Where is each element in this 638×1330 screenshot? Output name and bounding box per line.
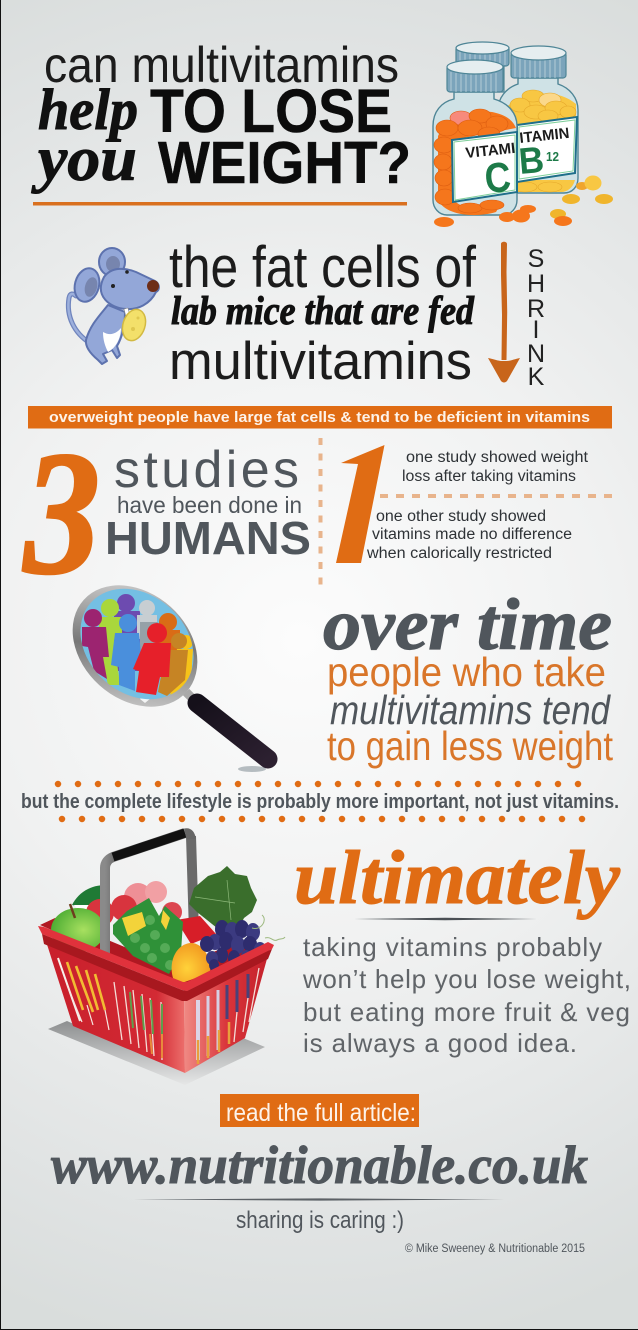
text: conclusion (302, 932, 631, 1058)
icon: vitamin bottles (433, 42, 613, 227)
handle front (105, 833, 185, 955)
text: study two: when calorically restricted (366, 545, 552, 562)
vertical word: SHRINK: R (527, 295, 545, 323)
script word: help: help (38, 77, 138, 142)
heading line: WEIGHT?: WEIGHT? (158, 130, 411, 196)
bottle C: C (483, 153, 513, 202)
vertical word: SHRINK: H (527, 270, 545, 298)
basket slots (58, 958, 259, 1064)
text: study two: one other study showed (376, 508, 546, 525)
panel: lab mice (68, 235, 545, 391)
panel: ultimately (294, 836, 631, 1058)
basket rim (38, 926, 274, 991)
vertical word: SHRINK: K (528, 363, 545, 391)
button: read the full article: read the full article: (226, 1099, 416, 1127)
loose pills (434, 176, 613, 227)
heading line: TO LOSE: TO LOSE (150, 77, 392, 145)
text: conclusion: but eating more fruit & veg (303, 997, 630, 1027)
arrow: shrink (488, 242, 520, 382)
bottle B12: B (517, 139, 546, 182)
text: study two (366, 508, 572, 562)
text: study one: one study showed weight (406, 449, 589, 466)
copyright: © Mike Sweeney & Nutritionable 2015 (405, 1243, 585, 1255)
text: studies: studies (114, 441, 299, 499)
text: conclusion: taking vitamins probably (303, 932, 602, 962)
bottle B12: ITAMIN (519, 125, 570, 147)
banner: overweight people (28, 406, 612, 428)
basket right face (184, 948, 270, 1073)
panel: three studies (22, 416, 311, 611)
script url: www.nutritionable.co.uk (51, 1135, 588, 1195)
text: conclusion: is always a good idea. (303, 1028, 577, 1058)
panel: study results (336, 445, 612, 563)
text: people who take: people who take (327, 649, 606, 695)
panel: over time (323, 584, 614, 769)
panel: title (31, 37, 411, 206)
text: HUMANS: HUMANS (105, 512, 311, 564)
lens rim (48, 560, 222, 732)
vertical word: SHRINK (527, 245, 545, 391)
horizontal dashed divider (380, 494, 612, 498)
text: the fat cells of: the fat cells of (169, 235, 477, 300)
dotted rule top (58, 781, 579, 787)
handle (186, 692, 194, 700)
footer rule (134, 1198, 504, 1201)
bottle B12 (498, 46, 578, 193)
script text: lab mice that are fed: lab mice that are fed (171, 288, 475, 333)
heading line: can multivitamins: can multivitamins (44, 37, 399, 93)
people (82, 594, 193, 696)
back rim (40, 918, 273, 987)
leaf (72, 866, 257, 932)
vertical word: SHRINK: I (533, 316, 539, 344)
text: sharing is caring: sharing is caring :) (236, 1207, 404, 1234)
text: study one (402, 449, 589, 485)
dotted rule bottom (62, 816, 583, 822)
number 3: 3 (22, 416, 100, 611)
vertical word: SHRINK: N (527, 340, 545, 368)
vertical word: SHRINK: S (528, 245, 544, 273)
handle shadow (238, 766, 266, 772)
icon: magnifying glass over people (72, 585, 278, 772)
basket left face (44, 935, 185, 1073)
bottle C (433, 60, 517, 215)
bottle C: VITAMI (465, 140, 516, 162)
bottle B12: 12 (546, 149, 559, 164)
script heading: over time: over time (323, 584, 612, 665)
basket shadow (48, 1021, 265, 1085)
title underline (33, 202, 407, 206)
text: conclusion: won’t help you lose weight, (302, 964, 631, 994)
back bottle (456, 42, 509, 92)
text: study one: loss after taking vitamins (402, 468, 576, 485)
icon: fruit basket (38, 833, 285, 1085)
underline stroke (354, 918, 537, 920)
text: have been done in: have been done in (117, 492, 302, 518)
banner: overweight people: overweight people have large fat cells & tend to be deficient in vitamins (49, 409, 590, 426)
vertical dashed divider (318, 438, 322, 590)
number 1 (336, 445, 384, 563)
script word: you: you (31, 123, 137, 194)
handle back post (191, 836, 194, 932)
panel: footer (51, 1094, 588, 1255)
icon: mouse (68, 248, 159, 364)
text: study two: vitamins made no difference (372, 526, 572, 543)
script heading: ultimately: ultimately (294, 836, 620, 920)
text: multivitamins: multivitamins (169, 332, 472, 391)
fruits (51, 881, 285, 985)
